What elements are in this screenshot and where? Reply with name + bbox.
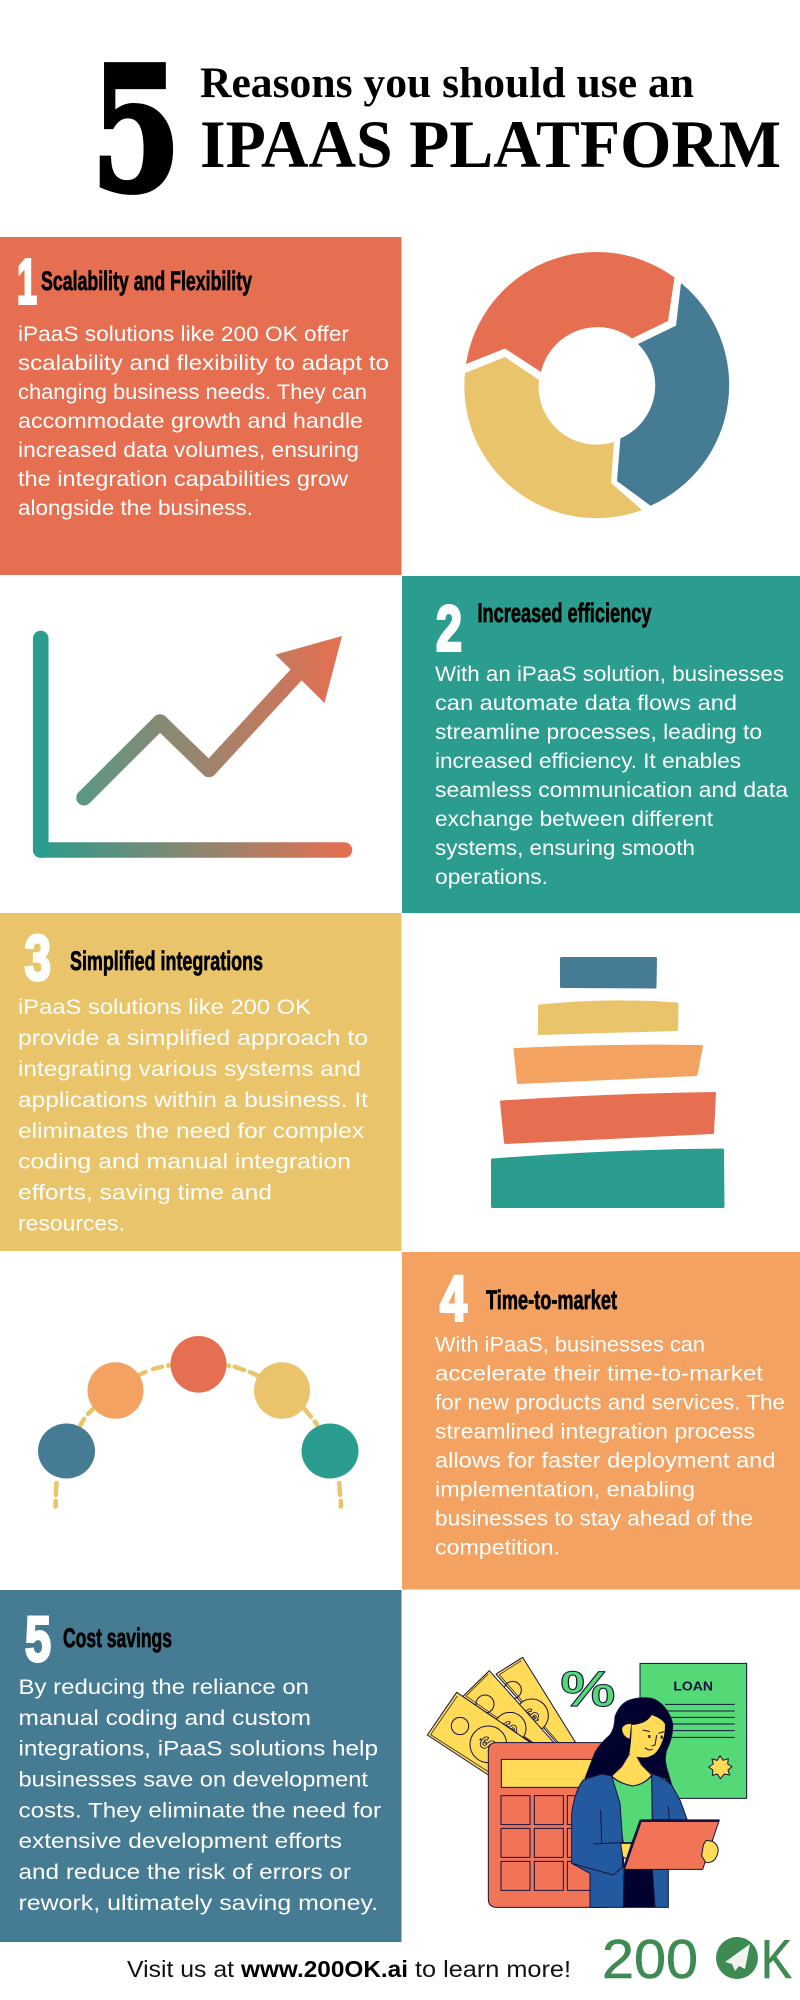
stacked pyramid	[492, 958, 723, 1206]
body text 5: businesses save on development	[18, 1768, 368, 1792]
sleeve	[572, 1806, 669, 1875]
cash bills: $	[518, 1704, 544, 1727]
body text 2: exchange between different	[435, 807, 713, 831]
thumb	[621, 1843, 632, 1859]
hand	[702, 1841, 718, 1863]
body text 3: eliminates the need for complex	[18, 1119, 364, 1143]
layer: yellow	[540, 1002, 677, 1034]
body text 3: integrating various systems and	[18, 1057, 361, 1081]
panel 3: simplified integrations	[0, 913, 402, 1251]
body text 2: operations.	[435, 865, 548, 889]
panel 2: increased efficiency	[402, 576, 800, 913]
body text 5	[18, 1675, 381, 1915]
body text 1: the integration capabilities grow	[18, 467, 349, 491]
trend line	[84, 675, 296, 798]
circle: orange	[88, 1362, 144, 1419]
number 2: 2	[436, 592, 462, 664]
body text 2: streamline processes, leading to	[435, 720, 762, 744]
document lines	[665, 1704, 735, 1737]
footer call to action	[127, 1956, 571, 1982]
heading 1: Scalability and Flexibility	[41, 266, 252, 296]
neck	[612, 1754, 652, 1786]
segment: yellow	[464, 357, 642, 518]
body text 1: accommodate growth and handle	[18, 409, 363, 433]
woman	[572, 1698, 719, 1907]
icon: paper plane in circle	[716, 1937, 758, 1979]
layer: teal	[492, 1150, 723, 1206]
body text 3	[18, 995, 368, 1236]
cash bills	[427, 1657, 576, 1775]
body text 4	[435, 1333, 785, 1560]
cash bills: $	[496, 1717, 522, 1739]
circle: yellow	[254, 1362, 310, 1419]
percent sign: %	[560, 1661, 615, 1717]
body text 5: manual coding and custom	[18, 1706, 311, 1730]
body text 2: seamless communication and data	[435, 778, 788, 802]
calculator display	[501, 1759, 595, 1787]
vertical axis overlay	[33, 638, 48, 850]
body text 4: With iPaaS, businesses can	[435, 1333, 705, 1357]
seal	[709, 1756, 732, 1779]
circle: red	[170, 1336, 226, 1393]
tablet edge	[624, 1821, 719, 1868]
donut cycle chart	[464, 252, 729, 518]
eyes	[649, 1735, 662, 1739]
body text 3: iPaaS solutions like 200 OK	[18, 995, 312, 1019]
loan label: LOAN	[673, 1680, 713, 1694]
hair	[585, 1698, 673, 1785]
jacket left	[572, 1774, 624, 1907]
logo: 200 OK	[602, 1928, 792, 1990]
body text 1: iPaaS solutions like 200 OK offer	[18, 322, 349, 346]
jacket right	[652, 1774, 687, 1907]
panel 4: time-to-market	[402, 1252, 800, 1590]
body text 4: streamlined integration process	[435, 1420, 755, 1444]
circle: blue	[38, 1424, 95, 1478]
number 3: 3	[24, 922, 51, 994]
body text 2: With an iPaaS solution, businesses	[435, 662, 784, 686]
body text 3: efforts, saving time and	[18, 1180, 272, 1204]
chart axes	[41, 638, 344, 850]
panel 5: cost savings	[0, 1590, 402, 1942]
face	[629, 1715, 665, 1757]
body text 5: costs. They eliminate the need for	[18, 1799, 381, 1823]
body text 5: integrations, iPaaS solutions help	[18, 1737, 378, 1761]
body text 4: businesses to stay ahead of the	[435, 1507, 753, 1531]
body text 3: provide a simplified approach to	[18, 1026, 368, 1050]
layer: blue	[562, 958, 656, 987]
title line 1: Reasons you should use an	[200, 60, 694, 107]
heading 4: Time-to-market	[486, 1285, 617, 1315]
closing phrase: to learn more!	[415, 1956, 571, 1982]
trousers	[623, 1868, 655, 1907]
heading 3: Simplified integrations	[70, 946, 263, 976]
body text 5: extensive development efforts	[18, 1829, 342, 1853]
segment: red	[466, 252, 674, 372]
footer call to action: Visit us at	[127, 1956, 235, 1982]
loan document	[640, 1663, 747, 1798]
body text 4: implementation, enabling	[435, 1478, 695, 1502]
body text 3: resources.	[18, 1212, 125, 1236]
body text 1	[18, 322, 389, 520]
body text 3: applications within a business. It	[18, 1088, 368, 1112]
heading 2: Increased efficiency	[478, 598, 652, 628]
tablet	[624, 1820, 719, 1869]
website url: www.200OK.ai	[240, 1956, 408, 1982]
body text 5: rework, ultimately saving money.	[18, 1891, 378, 1915]
dashed connectors	[56, 1365, 341, 1506]
number 4: 4	[440, 1262, 467, 1334]
layer: red	[502, 1094, 714, 1142]
body text 3: coding and manual integration	[18, 1150, 351, 1174]
title line 2: IPAAS PLATFORM	[200, 106, 781, 182]
body text 5: By reducing the reliance on	[18, 1675, 309, 1699]
number 1: 1	[17, 246, 37, 318]
number 5: 5	[25, 1603, 51, 1675]
line chart with rising arrow	[41, 636, 344, 850]
body text 2	[435, 662, 788, 889]
arrow head	[276, 636, 342, 703]
panel 1: scalability and flexibility	[0, 237, 402, 575]
body text 1: changing business needs. They can	[18, 380, 367, 404]
logo: 200 OK: 200	[602, 1928, 698, 1990]
segment: blue	[617, 283, 729, 506]
shirt	[612, 1776, 652, 1843]
facial features	[643, 1730, 664, 1750]
body text 4: accelerate their time-to-market	[435, 1362, 763, 1386]
body text 1: scalability and flexibility to adapt to	[18, 351, 389, 375]
body text 5: and reduce the risk of errors or	[18, 1860, 351, 1884]
body text 4: for new products and services. The	[435, 1391, 785, 1415]
body text 2: can automate data flows and	[435, 691, 737, 715]
calculator keys	[501, 1796, 596, 1890]
logo letter K: K	[761, 1928, 792, 1990]
body text 2: increased efficiency. It enables	[435, 749, 741, 773]
calculator	[488, 1743, 607, 1907]
body text 1: alongside the business.	[18, 496, 253, 520]
title	[91, 28, 781, 231]
circle: teal	[302, 1424, 358, 1478]
cash bills: $	[474, 1732, 503, 1757]
body text 1: increased data volumes, ensuring	[18, 438, 359, 462]
heading 5: Cost savings	[63, 1623, 172, 1653]
ear	[622, 1723, 632, 1739]
layer: orange	[515, 1046, 702, 1082]
big numeral 5: 5	[91, 28, 181, 231]
dotted arc with five circles	[38, 1336, 358, 1506]
body text 4: competition.	[435, 1536, 560, 1560]
body text 2: systems, ensuring smooth	[435, 836, 695, 860]
body text 4: allows for faster deployment and	[435, 1449, 776, 1473]
illustration: woman with calculator, cash and loan document	[427, 1657, 747, 1907]
